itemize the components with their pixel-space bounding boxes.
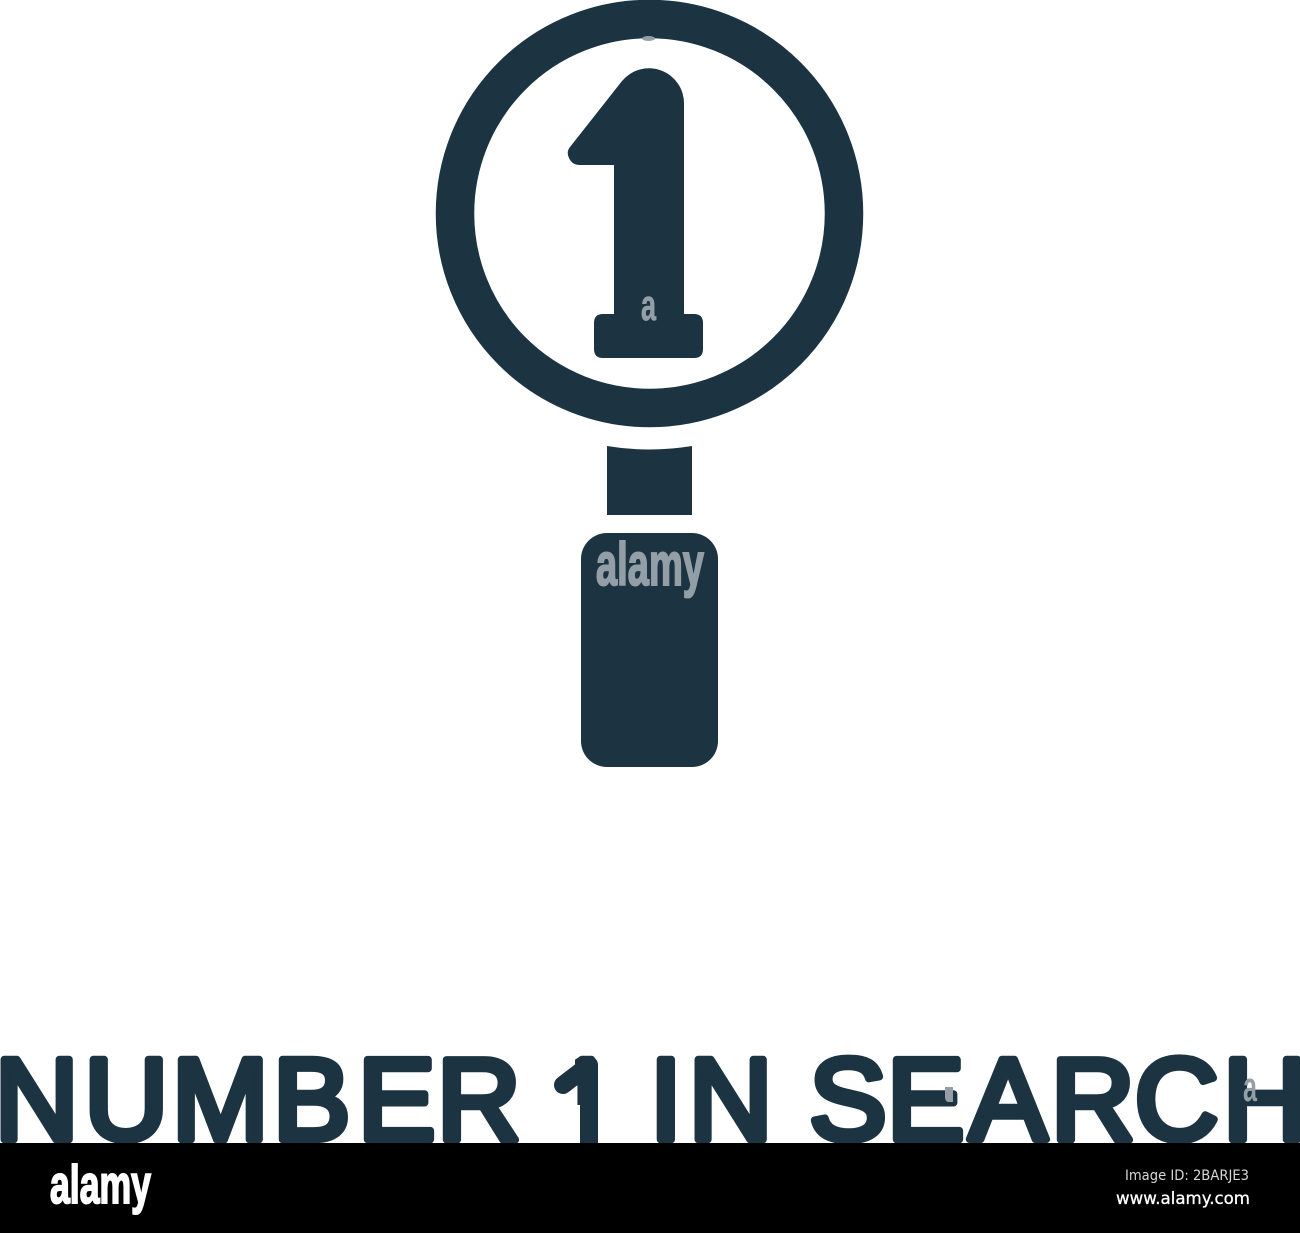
title word: NUMBER: NUMBER [0,1034,521,1164]
watermark letter on H: a [1243,1063,1257,1110]
title numeral: 1: 1 [552,1034,617,1164]
magnifier lens ring [455,19,844,408]
icon: magnifying glass with number 1 [455,19,844,767]
magnifier neck [607,446,692,515]
watermark on handle: alamy [596,531,704,598]
title watermark fragments [945,1063,1257,1110]
title word: IN: IN [650,1034,772,1164]
footer logo: alamy [50,1155,151,1215]
title word: SEARCH: SEARCH [809,1034,1300,1164]
footer background [0,1143,1300,1233]
watermark fragment on ring [642,36,655,41]
watermark letter on E [945,1087,953,1102]
watermark letter on number: a [641,281,656,330]
footer band [0,1143,1300,1233]
magnifier handle grip [581,533,718,767]
website url: www.alamy.com [1116,1189,1250,1208]
number 1 glyph [568,68,703,358]
title numeral stem and flag [563,1065,589,1134]
title [0,1054,1300,1143]
image id: Image ID: 2BARJE3 [1125,1168,1249,1184]
